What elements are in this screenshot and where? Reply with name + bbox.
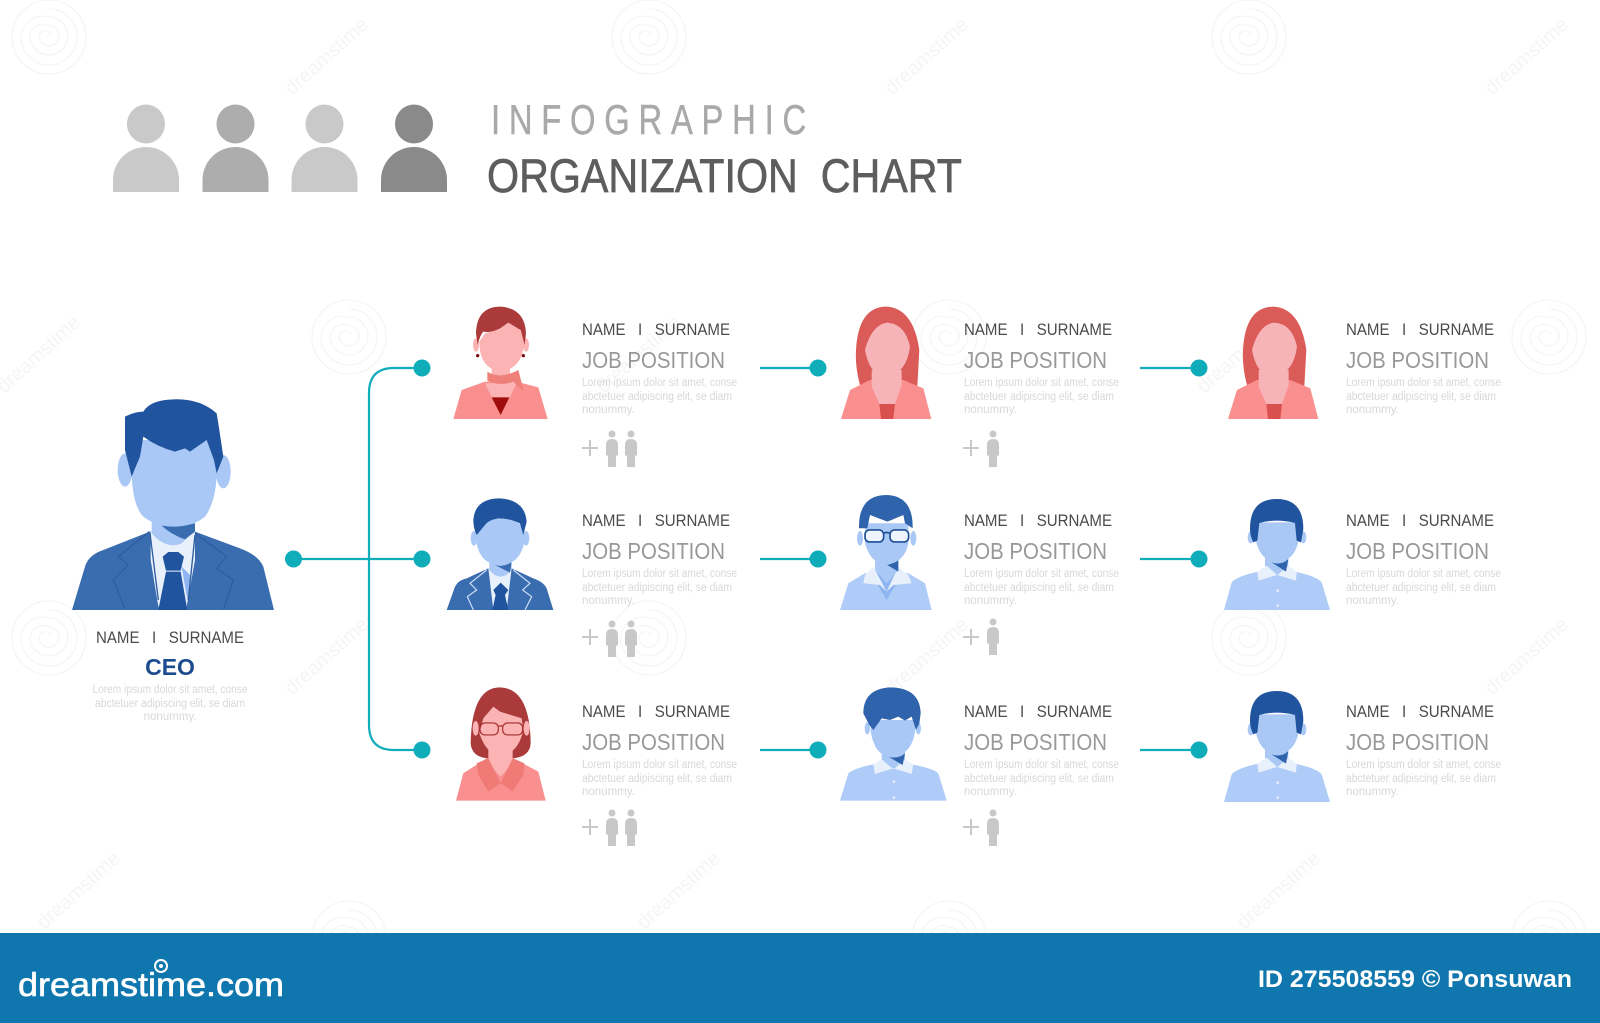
watermark: dreamstime (881, 613, 973, 700)
text block: row 1 column 1: Lorem ipsum dolor sit amet, conse (582, 377, 737, 389)
text block: row 2 column 1: NAME I SURNAME (582, 511, 730, 530)
text block: row 3 column 2: Lorem ipsum dolor sit amet, conse (964, 759, 1119, 771)
title: ORGANIZATION CHART (487, 149, 962, 202)
watermark: dreamstime (1481, 13, 1573, 100)
footer credit: ID 275508559 © Ponsuwan (1258, 966, 1572, 993)
text block: row 2 column 3: Lorem ipsum dolor sit amet, conse (1346, 568, 1501, 580)
watermark: dreamstime (281, 13, 373, 100)
icon: plus one person, row 2 (963, 618, 999, 655)
watermark: dreamstime (281, 613, 373, 700)
CEO text (92, 628, 248, 723)
CEO avatar (72, 399, 274, 610)
avatar: man in dark suit (447, 498, 553, 610)
icon: plus two people, row 2 (582, 620, 637, 657)
text block: row 1 column 3: Lorem ipsum dolor sit amet, conse (1346, 377, 1501, 389)
title (487, 96, 962, 202)
avatar: man in shirt (column 3, row 3) (1224, 691, 1330, 802)
text block: row 2 column 2: JOB POSITION (964, 538, 1107, 564)
icon: plus one person, row 3 (963, 810, 999, 846)
watermark: dreamstime (1193, 311, 1285, 398)
text block: row 1 column 2: NAME I SURNAME (964, 320, 1112, 339)
text block: row 1 column 2 (964, 320, 1119, 416)
watermark: dreamstime (881, 13, 973, 100)
text block: row 3 column 2: abctetuer adipiscing elit, se diam (964, 773, 1114, 785)
text block: row 3 column 3: abctetuer adipiscing elit, se diam (1346, 773, 1496, 785)
text block: row 2 column 3 (1346, 511, 1501, 607)
text block: row 2 column 1 (582, 511, 737, 607)
CEO text: Lorem ipsum dolor sit amet, conse (92, 684, 248, 696)
text block: row 1 column 1: abctetuer adipiscing elit, se diam (582, 391, 732, 403)
text block: row 2 column 2: abctetuer adipiscing elit, se diam (964, 582, 1114, 594)
watermark: dreamstime (33, 847, 125, 934)
text block: row 2 column 2: NAME I SURNAME (964, 511, 1112, 530)
text block: row 1 column 2: Lorem ipsum dolor sit amet, conse (964, 377, 1119, 389)
text block: row 3 column 3: nonummy. (1346, 786, 1399, 798)
text block: row 3 column 3 (1346, 702, 1501, 798)
header icons: four grey people (113, 104, 447, 192)
text block: row 3 column 2: NAME I SURNAME (964, 702, 1112, 721)
text block: row 3 column 1: NAME I SURNAME (582, 702, 730, 721)
watermark: dreamstime (633, 847, 725, 934)
text block: row 2 column 1: nonummy. (582, 595, 635, 607)
CEO text: abctetuer adipiscing elit, se diam (95, 698, 245, 710)
avatar: woman with long red hair (column 2) (841, 307, 931, 419)
text block: row 1 column 1: nonummy. (582, 404, 635, 416)
text block: row 3 column 2: nonummy. (964, 786, 1017, 798)
title: INFOGRAPHIC (491, 96, 806, 143)
text block: row 3 column 1: JOB POSITION (582, 729, 725, 755)
avatar: woman with glasses (456, 687, 546, 801)
text block: row 3 column 3: NAME I SURNAME (1346, 702, 1494, 721)
text block: row 3 column 1: abctetuer adipiscing elit, se diam (582, 773, 732, 785)
watermark: dreamstime (1233, 847, 1325, 934)
text block: row 1 column 2: JOB POSITION (964, 347, 1107, 373)
avatar: red woman with scarf (453, 307, 548, 419)
text block: row 3 column 3: Lorem ipsum dolor sit amet, conse (1346, 759, 1501, 771)
text block: row 2 column 3: JOB POSITION (1346, 538, 1489, 564)
icon: plus two people, row 1 (582, 430, 637, 467)
text block: row 3 column 1: nonummy. (582, 786, 635, 798)
text block: row 2 column 2 (964, 511, 1119, 607)
connector dots (285, 360, 1208, 758)
watermark: dreamstime (593, 311, 685, 398)
watermark: dreamstime (1481, 613, 1573, 700)
text block: row 2 column 1: Lorem ipsum dolor sit amet, conse (582, 568, 737, 580)
text block: row 3 column 2 (964, 702, 1119, 798)
text block: row 1 column 1 (582, 320, 737, 416)
avatar: man in shirt (column 3, row 2) (1224, 499, 1330, 610)
CEO text: nonummy. (144, 711, 196, 723)
text block: row 1 column 2: nonummy. (964, 404, 1017, 416)
text block: row 1 column 3: NAME I SURNAME (1346, 320, 1494, 339)
CEO text: CEO (145, 654, 195, 680)
avatar: man in shirt with messy hair (840, 687, 947, 801)
text block: row 2 column 1: JOB POSITION (582, 538, 725, 564)
text block: row 1 column 3: nonummy. (1346, 404, 1399, 416)
text block: row 2 column 3: nonummy. (1346, 595, 1399, 607)
footer band (0, 933, 1600, 1023)
icon: plus two people, row 3 (582, 810, 637, 846)
avatar: woman with long red hair (column 3) (1228, 307, 1318, 419)
text block: row 1 column 3 (1346, 320, 1501, 416)
text block: row 1 column 3: JOB POSITION (1346, 347, 1489, 373)
text block: row 1 column 2: abctetuer adipiscing elit, se diam (964, 391, 1114, 403)
text block: row 3 column 3: JOB POSITION (1346, 729, 1489, 755)
icon: plus one person, row 1 (963, 430, 999, 467)
text block: row 1 column 1: JOB POSITION (582, 347, 725, 373)
text block: row 2 column 3: abctetuer adipiscing elit, se diam (1346, 582, 1496, 594)
CEO text: NAME I SURNAME (96, 628, 244, 647)
text block: row 2 column 1: abctetuer adipiscing elit, se diam (582, 582, 732, 594)
text block: row 1 column 1: NAME I SURNAME (582, 320, 730, 339)
connector lines (293, 368, 1199, 750)
footer logo: dreamstime.com (18, 966, 284, 1003)
text block: row 3 column 1: Lorem ipsum dolor sit amet, conse (582, 759, 737, 771)
text block: row 2 column 2: Lorem ipsum dolor sit amet, conse (964, 568, 1119, 580)
avatar: man with glasses (840, 495, 932, 610)
text block: row 3 column 2: JOB POSITION (964, 729, 1107, 755)
text block: row 3 column 1 (582, 702, 737, 798)
text block: row 1 column 3: abctetuer adipiscing elit, se diam (1346, 391, 1496, 403)
text block: row 2 column 2: nonummy. (964, 595, 1017, 607)
text block: row 2 column 3: NAME I SURNAME (1346, 511, 1494, 530)
